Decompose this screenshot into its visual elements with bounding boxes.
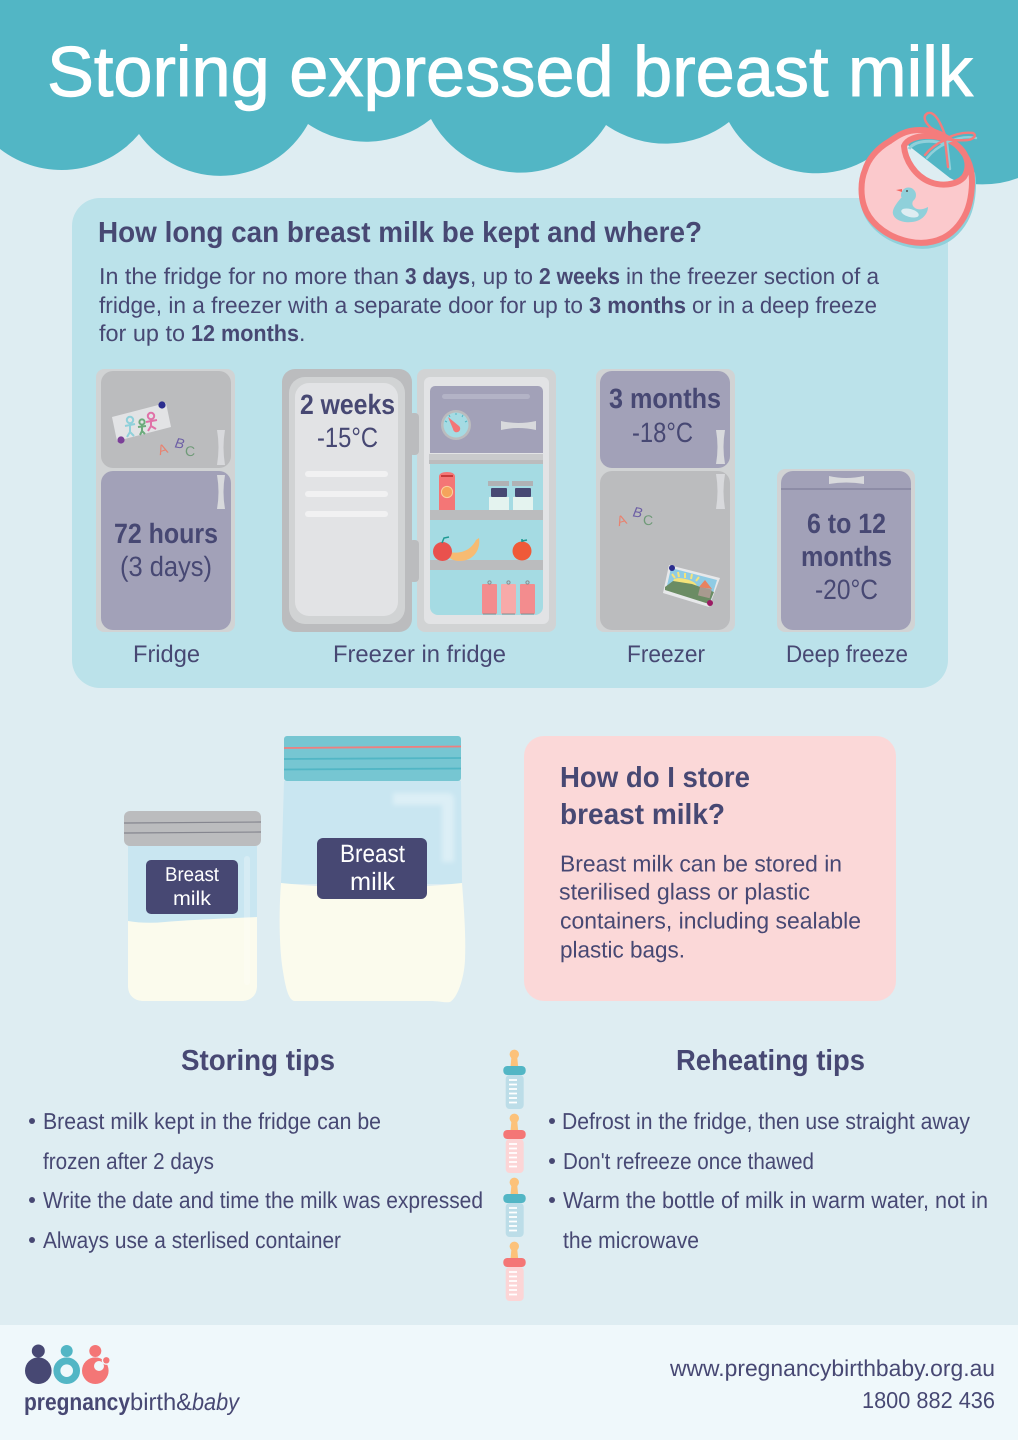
logo wordmark <box>24 1389 241 1416</box>
icon: temperature gauge <box>441 410 471 440</box>
icon: logo figures <box>25 1344 111 1384</box>
storing tips list: Write the date and time the milk was expressed <box>43 1187 483 1213</box>
icon: coral bottle <box>503 1242 526 1301</box>
illustration: sealable bag of breast milk <box>280 736 465 1002</box>
bag label text: Breast <box>340 840 405 868</box>
freezer-in-fridge label: Freezer in fridge <box>333 641 506 668</box>
fridge duration: 72 hours <box>114 518 218 549</box>
icon: ABC magnets: C <box>185 443 195 459</box>
column of baby bottles <box>503 1050 526 1301</box>
website and phone <box>669 1355 995 1413</box>
fridge illustration <box>96 369 235 668</box>
bag label text <box>340 840 405 896</box>
storing tips list: frozen after 2 days <box>43 1148 214 1174</box>
reheating tips list: Defrost in the fridge, then use straight away <box>562 1108 970 1134</box>
freezer in fridge illustration: -15°C <box>317 422 378 453</box>
panel: how do I store breast milk <box>524 736 896 1001</box>
footer <box>0 1325 1018 1440</box>
panel: how long can breast milk be kept <box>72 198 948 688</box>
pink panel body text: containers, including sealable <box>560 908 861 934</box>
freezer illustration: -18°C <box>632 417 693 448</box>
icon: duck <box>893 188 928 222</box>
reheating tips list: Don't refreeze once thawed <box>563 1148 814 1174</box>
bag label text: milk <box>350 868 396 896</box>
intro paragraph: in the freezer section of a <box>626 263 879 289</box>
fridge label: Fridge <box>133 641 200 668</box>
storing tips heading: Storing tips <box>181 1045 335 1077</box>
freezer in fridge illustration <box>282 369 556 668</box>
deep freeze duration: 6 to 12 <box>807 508 886 539</box>
pink panel heading: breast milk? <box>560 799 725 831</box>
icon: bib with duck <box>862 113 976 246</box>
icon: teal bottle <box>503 1178 526 1237</box>
intro paragraph: In the fridge for no more than <box>99 263 399 289</box>
reheating tips heading: Reheating tips <box>676 1045 865 1077</box>
icon: drink cans <box>482 581 535 614</box>
pink panel heading: How do I store <box>560 762 750 794</box>
title: Storing expressed breast milk <box>47 33 973 112</box>
freezer illustration <box>596 369 735 668</box>
intro paragraph: 3 days <box>405 263 470 289</box>
intro paragraph: fridge, in a freezer with a separate door for up to <box>99 292 583 318</box>
icon: teal bottle <box>503 1050 526 1109</box>
icon: note with stick figures <box>112 401 171 444</box>
freezer-in-fridge duration: 2 weeks <box>300 389 395 420</box>
panel heading: How long can breast milk be kept and where? <box>98 217 702 249</box>
reheating tips list: the microwave <box>563 1227 699 1253</box>
icon: apple, banana and orange <box>433 537 532 561</box>
storing tips <box>29 1045 483 1253</box>
pink panel heading <box>560 762 750 831</box>
bib ribbon <box>925 113 976 169</box>
intro paragraph: , up to <box>470 263 533 289</box>
intro paragraph <box>99 263 879 346</box>
icon: ABC magnets: A <box>156 440 170 458</box>
pink panel body text: sterilised glass or plastic <box>559 878 810 904</box>
intro paragraph: or in a deep freeze <box>692 292 877 318</box>
intro paragraph: 3 months <box>589 292 686 318</box>
icon: ABC magnets: C <box>643 512 653 528</box>
icon: coral bottle <box>503 1114 526 1173</box>
icon: ABC magnets: A <box>615 511 629 529</box>
storing tips list: Breast milk kept in the fridge can be <box>43 1108 381 1134</box>
icon: juice carton <box>439 472 455 510</box>
reheating tips list: Warm the bottle of milk in warm water, not in <box>563 1187 988 1213</box>
logo wordmark: baby <box>192 1389 241 1416</box>
deep freeze illustration <box>777 469 915 668</box>
intro paragraph: for up to <box>99 320 185 346</box>
reheating tips list <box>549 1108 988 1253</box>
jar label text: milk <box>173 888 212 910</box>
website and phone: 1800 882 436 <box>862 1387 995 1413</box>
storing tips list <box>29 1108 483 1253</box>
icon: ABC magnets: B <box>174 434 186 452</box>
logo wordmark: birth& <box>130 1389 192 1416</box>
icon: photo magnet <box>663 565 720 607</box>
storing tips list: Always use a sterlised container <box>43 1227 341 1253</box>
pink panel body text: plastic bags. <box>560 936 685 962</box>
intro paragraph: 12 months <box>191 320 299 346</box>
reheating tips <box>549 1045 988 1253</box>
logo <box>24 1344 241 1416</box>
icon: ABC magnets <box>156 434 195 459</box>
icon: ABC magnets: B <box>632 503 644 521</box>
logo wordmark: pregnancy <box>24 1389 131 1416</box>
deep freeze label: Deep freeze <box>786 641 908 668</box>
intro paragraph: 2 weeks <box>539 263 620 289</box>
pink panel body text: Breast milk can be stored in <box>560 850 842 876</box>
pink panel body text <box>559 850 861 962</box>
website and phone: www.pregnancybirthbaby.org.au <box>669 1355 995 1381</box>
icon: ABC magnets <box>615 503 653 529</box>
intro paragraph: . <box>299 320 305 346</box>
freezer label: Freezer <box>627 641 705 668</box>
fridge illustration: (3 days) <box>120 551 212 582</box>
header banner with cloud edge <box>0 0 1018 184</box>
illustration: jar of breast milk <box>124 811 261 1001</box>
deep freeze illustration: -20°C <box>815 574 878 605</box>
freezer duration: 3 months <box>609 383 721 414</box>
deep freeze illustration: months <box>801 541 892 572</box>
icon: milk jars on shelf <box>488 481 533 510</box>
jar label text: Breast <box>165 864 219 886</box>
jar label text <box>165 864 219 910</box>
